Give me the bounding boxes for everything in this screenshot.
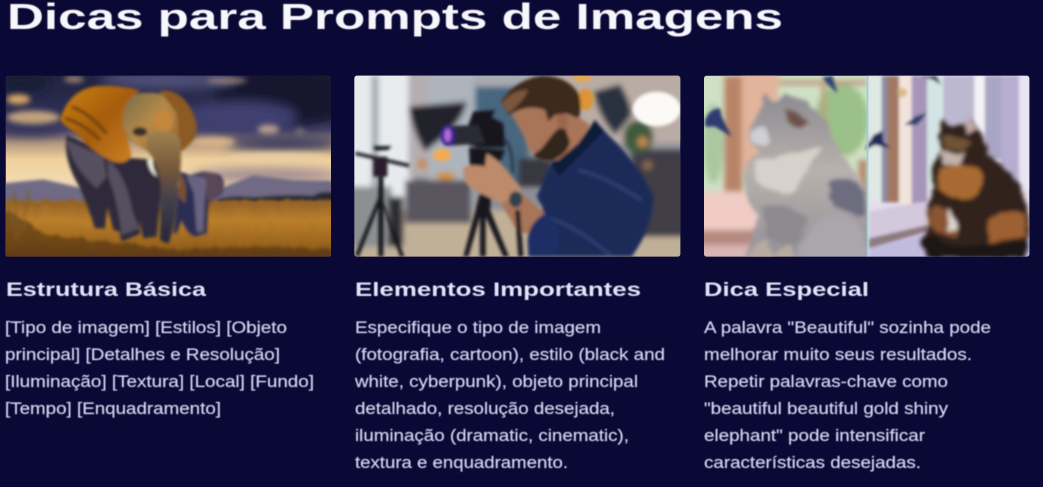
trunk: [147, 131, 181, 244]
calf: [173, 172, 224, 237]
body text: [354, 318, 665, 472]
body text: elephant" pode intensificar: [704, 426, 925, 445]
body text: [5, 318, 314, 418]
heading: Elementos Importantes: [355, 280, 641, 301]
body text: Especifique o tipo de imagem: [355, 318, 601, 337]
softbox: [408, 102, 467, 152]
right half: [867, 76, 1031, 257]
left half: [704, 76, 867, 257]
body text: detalhado, resolução desejada,: [355, 399, 615, 418]
camera: [468, 110, 505, 147]
body text: melhorar muito seus resultados.: [704, 345, 972, 364]
left tripod: [355, 152, 410, 167]
ears: [60, 86, 140, 162]
divider line: [867, 76, 868, 257]
body text: principal] [Detalhes e Resolução]: [5, 345, 280, 364]
neck + face: [512, 108, 590, 162]
body text: Repetir palavras-chave como: [704, 372, 948, 391]
hair: [501, 76, 581, 122]
arms and hands: [500, 193, 545, 233]
body text: [Tempo] [Enquadramento]: [5, 399, 221, 418]
elephant body: [66, 135, 162, 242]
panel: Estrutura Básica: [5, 76, 331, 418]
warm lights: [418, 158, 427, 170]
shirt: [528, 120, 653, 257]
image: photographer with camera in studio: [348, 70, 688, 263]
body text: "beautiful beautiful gold shiny: [704, 399, 949, 418]
panel: Dica Especial: [698, 70, 1035, 472]
body text: A palavra "Beautiful" sozinha pode: [704, 318, 991, 337]
birds right: [865, 131, 891, 150]
birds left: [705, 108, 732, 137]
centre tripod: [463, 193, 509, 257]
head: [118, 93, 180, 157]
body text: (fotografia, cartoon), estilo (black and: [355, 345, 665, 364]
body text: [Tipo de imagem] [Estilos] [Objeto: [5, 318, 287, 337]
body text: [704, 318, 991, 472]
body text: iluminação (dramatic, cinematic),: [355, 426, 629, 445]
body text: [Iluminação] [Textura] [Local] [Fundo]: [5, 372, 314, 391]
tusk: [148, 159, 157, 177]
heading: Dica Especial: [704, 280, 869, 301]
body text: textura e enquadramento.: [355, 453, 568, 472]
tortoiseshell cat: [921, 117, 1029, 257]
heading: Estrutura Básica: [6, 280, 207, 301]
body text: características desejadas.: [704, 453, 921, 472]
panel: Elementos Importantes: [348, 70, 688, 472]
body text: white, cyberpunk), objeto principal: [354, 372, 638, 391]
image: elephant and calf at sunset: [6, 76, 331, 257]
grey cat: [743, 93, 872, 263]
image: two cats at windows with birds: [698, 70, 1035, 263]
